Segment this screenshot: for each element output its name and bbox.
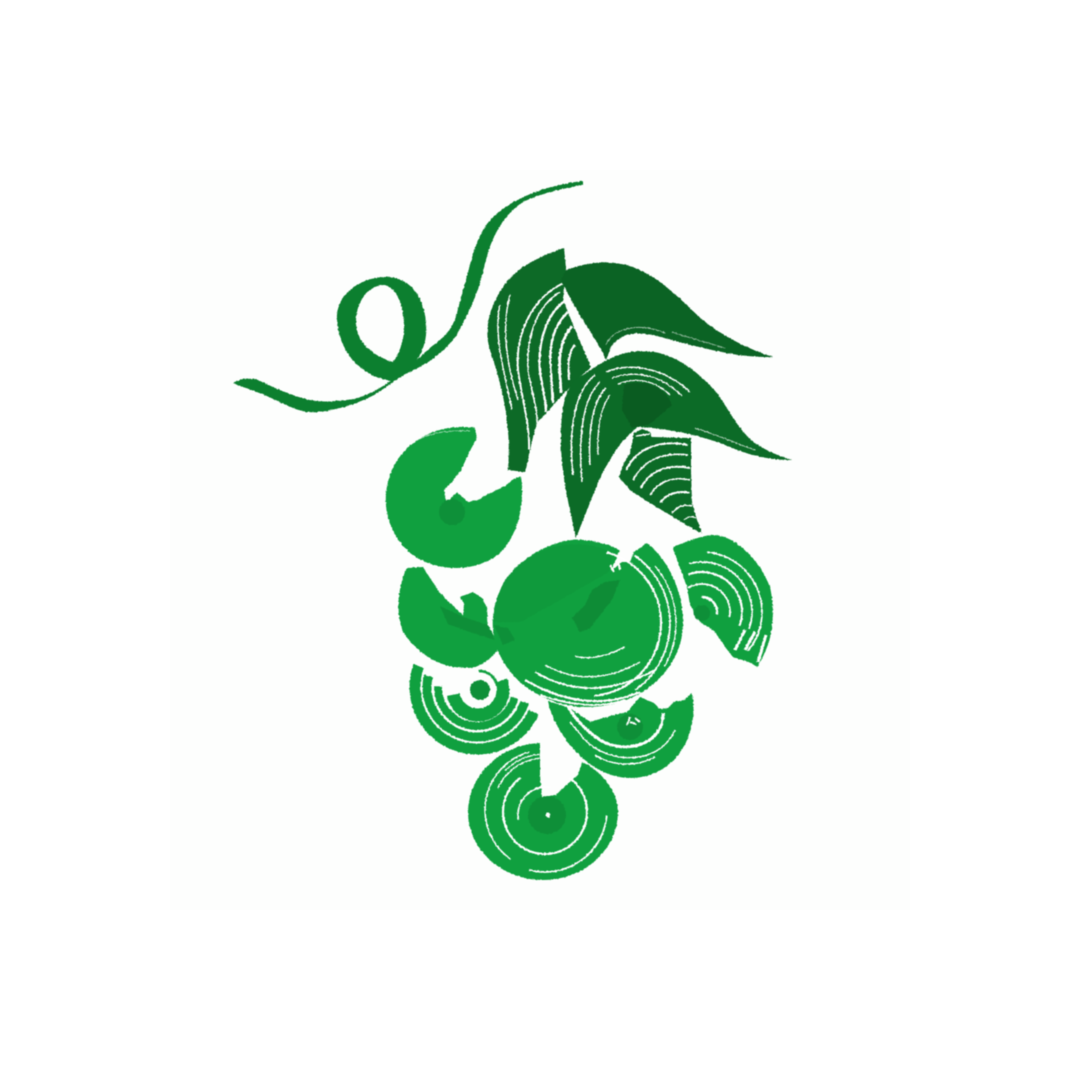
grape: top left xyxy=(386,427,522,568)
ring strokes: large grape xyxy=(500,535,676,711)
grape: lower left ringed xyxy=(415,625,539,749)
grape: right ringed xyxy=(642,535,773,672)
grape: left xyxy=(398,567,500,668)
tendril xyxy=(233,181,583,412)
leaf: middle xyxy=(561,351,792,538)
leaf: small fan xyxy=(619,429,702,533)
leaf: left vertical xyxy=(487,248,591,472)
grape: lower right ringed xyxy=(548,693,693,778)
leaf: top right xyxy=(561,262,773,360)
grape: bottom ringed xyxy=(468,743,618,880)
grape: large centre xyxy=(493,535,683,711)
